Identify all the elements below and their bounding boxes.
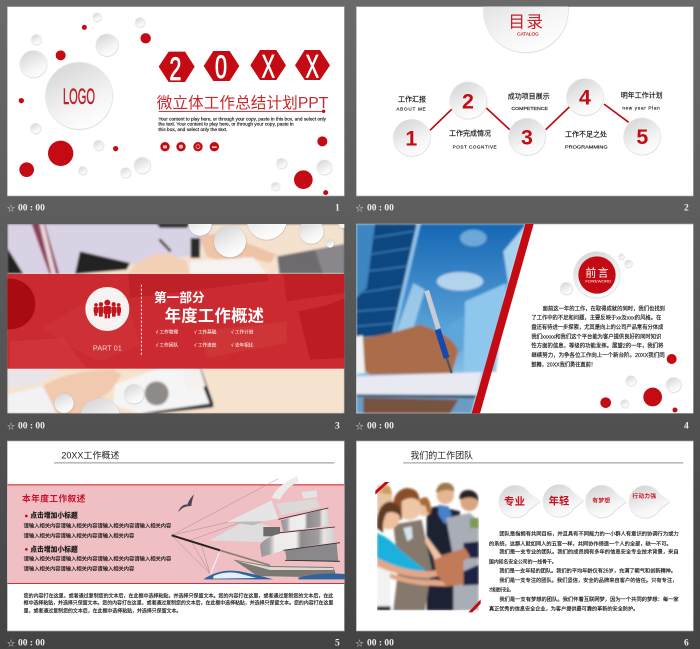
checklist: √ 工作计划 [231,329,254,336]
footer: slide 2: ☆ [356,204,364,213]
panel: slide 6 team [356,441,693,631]
office photo bottom [7,368,344,414]
photo paper circles [54,200,349,438]
panel: slide 1 cover [7,7,344,196]
band bullet text: 请输入相关内容请输入相关内容请输入相关内容 [24,531,134,539]
foreword paragraph: 继续努力，为争各位工作向上一个新台阶。20XX我们同 [531,351,665,359]
band bullet text: 请输入相关内容请输入相关内容请输入相关内容 [24,565,134,573]
footer: slide 6: ☆ [356,639,364,648]
band bullet text: 请输入相关内容请输入相关内容请输入相关内容请输入相关内容 [24,521,171,529]
team paragraph: 我们是一支年轻的团队。我们的平均年龄仅有26岁，充满了朝气和创新精神。 [499,567,676,575]
bottom paragraph: 框中选择粘贴，并选择只保留文本。您的内容打在这里，或者通过复制您的文本后，在此框中选择粘贴，并选择只保留文本。您的内容打在这里 [24,598,333,606]
numbered circles [393,79,660,156]
checklist: √ 去年相比 [231,342,254,349]
decorative red dots [19,25,328,195]
item labels: 明年工作计划 [621,91,663,100]
heading badge: 前言 [585,266,609,280]
foreword paragraph: 我们xxxxx和我们这个平台能为客户提供良好的同时知识 [531,332,662,340]
small icons [160,142,219,151]
icon: seagull [178,494,194,512]
team paragraph: 才能做好安全。 [489,585,513,593]
item labels: new year Plan [622,106,660,111]
bottom paragraph [24,591,333,614]
catalog heading circle [483,0,568,52]
item labels: ABOUT ME [396,106,426,111]
item labels: 工作完成情况 [449,129,491,138]
team paragraph: 真正优秀的信息安全企业，为客户提供最可靠的革新的安全防护。 [489,604,638,612]
description text [158,117,327,132]
decorative paper circles [20,13,332,190]
heading rule [54,462,334,464]
numbered circles: 4 [579,86,591,110]
year hexagons [159,48,330,87]
item labels: COMPETENCE [511,106,548,111]
dashed divider [140,285,143,356]
footer: slide 1: 1 [335,204,340,214]
icon: team in white circle [85,287,129,331]
description text: this box, and select only the text. [158,127,227,132]
foreword paragraph: 了工作中的不足和问题，主要反映于xx及xxx的风格。在 [531,314,662,322]
numbered circles: 5 [636,125,648,149]
bottom paragraph: 里，或者通过复制您的文本后，在此框中选择粘贴，并选择只保留文本。 [24,606,181,614]
tag bubbles: 专业 [504,495,525,508]
footer: slide 2: 2 [684,204,689,214]
footer: slide 4: ☆ [356,422,364,431]
footer: slide 5: 5 [335,638,340,648]
checklist: √ 工作管理 [156,329,178,336]
panel: slide 4 foreword [356,224,693,413]
team paragraph: 我们是一支有梦想的团队。我们怀着互联网梦，因为一个共同的梦想：每一家 [499,595,679,603]
foreword paragraph: 鼓舞，20XX我们勇往直前！ [531,361,596,369]
team paragraph [489,529,679,612]
footer: slide 4 [356,422,689,432]
footer: slide 6: 6 [684,638,689,648]
tag bubbles: 行动力强 [632,492,656,500]
band bullet text: 点击增加小标题 [30,544,78,553]
item labels: PROGRAMMING [565,144,608,149]
item labels: 工作汇报 [398,95,426,104]
logo circle [46,62,112,129]
panel: slide 5 overview [7,441,345,631]
decorative circles [560,254,681,412]
numbered circles: 3 [521,125,533,149]
footer: slide 3: ☆ [7,422,15,431]
pink band [7,484,344,584]
item labels: POST COGNTIVE [453,144,497,149]
footer: slide 2: 00 : 00 [367,204,394,214]
panel: slide 3 section [7,224,344,414]
band heading: 本年度工作叙述 [22,493,86,504]
team paragraph: 我们是一支专注的团队。我们坚信，安全的品牌来自客户的信任。只有专注， [499,576,677,584]
connector lines [430,104,629,130]
title underline [159,110,325,113]
team paragraph: 我们是一支专业的团队。我们的成员拥有多年的信息安全专业技术背景，来自 [499,548,679,556]
checklist: √ 工作团队 [156,342,178,349]
description text: the text. Your content to play here, or through your copy, paste in [158,122,294,127]
office photo top [7,224,344,413]
team paragraph: 团队是指拥有共同目标，并且具有不同能力的一小群人有意识的协调行为或力 [499,529,679,537]
year hexagons: X [306,48,319,84]
checklist: √ 工作基础 [194,329,217,336]
checklist: √ 工作进度 [194,342,217,349]
item labels: 工作不足之处 [565,130,607,139]
team photo [375,482,481,612]
footer: slide 6: 00 : 00 [367,638,394,648]
heading badge: FOREWORD [585,278,611,283]
tag bubbles: 有梦想 [592,497,610,505]
heading rule [403,462,683,464]
numbered circles: 1 [405,126,417,150]
footer: slide 5 [7,638,340,648]
team paragraph: 国内知名安全公司的一线骨干。 [489,557,557,565]
photo: city and hand writing [356,224,525,413]
part label: PART 01 [93,344,122,353]
section heading: 第一部分 [154,290,205,305]
footer: slide 3: 00 : 00 [18,422,45,432]
bottom paragraph: 您的内容打在这里，或者通过复制您的文本后，在此框中选择粘贴，并选择只保留文本。您的内容打在这里，或者通过复制您的文本后，在此 [24,591,333,599]
team paragraph: 的系统，这群人就如同人的五官一样，共同协作缔造一个人的全部，缺一不可。 [489,539,672,547]
foreword paragraph: 盘还有待进一步探索，尤其是向上的公司产品常有分体成 [531,323,664,331]
footer: slide 6 [356,638,689,648]
item labels: 成功项目展示 [508,92,550,101]
section heading [154,290,264,325]
footer: slide 4: 00 : 00 [367,422,394,432]
footer: slide 4: 4 [684,422,689,432]
diagonal red stripe [472,224,534,413]
foreword paragraph [531,304,665,369]
item labels [396,91,663,149]
footer: slide 3 [7,422,340,432]
year hexagons: X [262,48,275,84]
heading: 我们的工作团队 [410,450,473,461]
footer: slide 3: 3 [335,422,340,432]
panel: slide 2 contents [356,0,693,196]
footer: slide 5: ☆ [7,639,15,648]
title: 微立体工作总结计划PPT [157,95,329,112]
catalog heading circle: 目录 [508,12,543,31]
catalog heading circle: CATALOG [517,32,540,37]
tag bubbles [499,485,670,518]
year hexagons: 0 [215,49,227,85]
section heading: 年度工作概述 [165,306,264,325]
footer: slide 5: 00 : 00 [18,638,45,648]
logo circle: LOGO [63,84,95,109]
band bullet text: 点击增加小标题 [30,511,78,520]
band bullet text [24,511,171,573]
band bullet text: 请输入相关内容请输入相关内容请输入相关内容请输入相关内容 [24,555,171,563]
footer: slide 1: 00 : 00 [18,204,45,214]
footer: slide 1 [7,204,340,214]
description text: Your content to play here, or through your copy, paste in this box, and select only [158,117,327,122]
tag bubbles: 年轻 [549,494,569,507]
foreword paragraph: 性方面的信息，等级的功能发挥。展望2的一年，我们将 [531,342,664,350]
numbered circles: 2 [462,89,474,113]
illustration: sailing ship [172,476,345,579]
checklist [156,329,254,349]
heading badge [574,252,620,298]
red band [0,274,344,369]
year hexagons: 2 [169,51,181,87]
footer: slide 2 [356,204,689,214]
heading: 20XX工作概述 [61,450,119,461]
foreword paragraph: 面前这一年的工作，在取得成就的同时，我们也找到 [543,304,665,312]
footer: slide 1: ☆ [7,204,15,213]
